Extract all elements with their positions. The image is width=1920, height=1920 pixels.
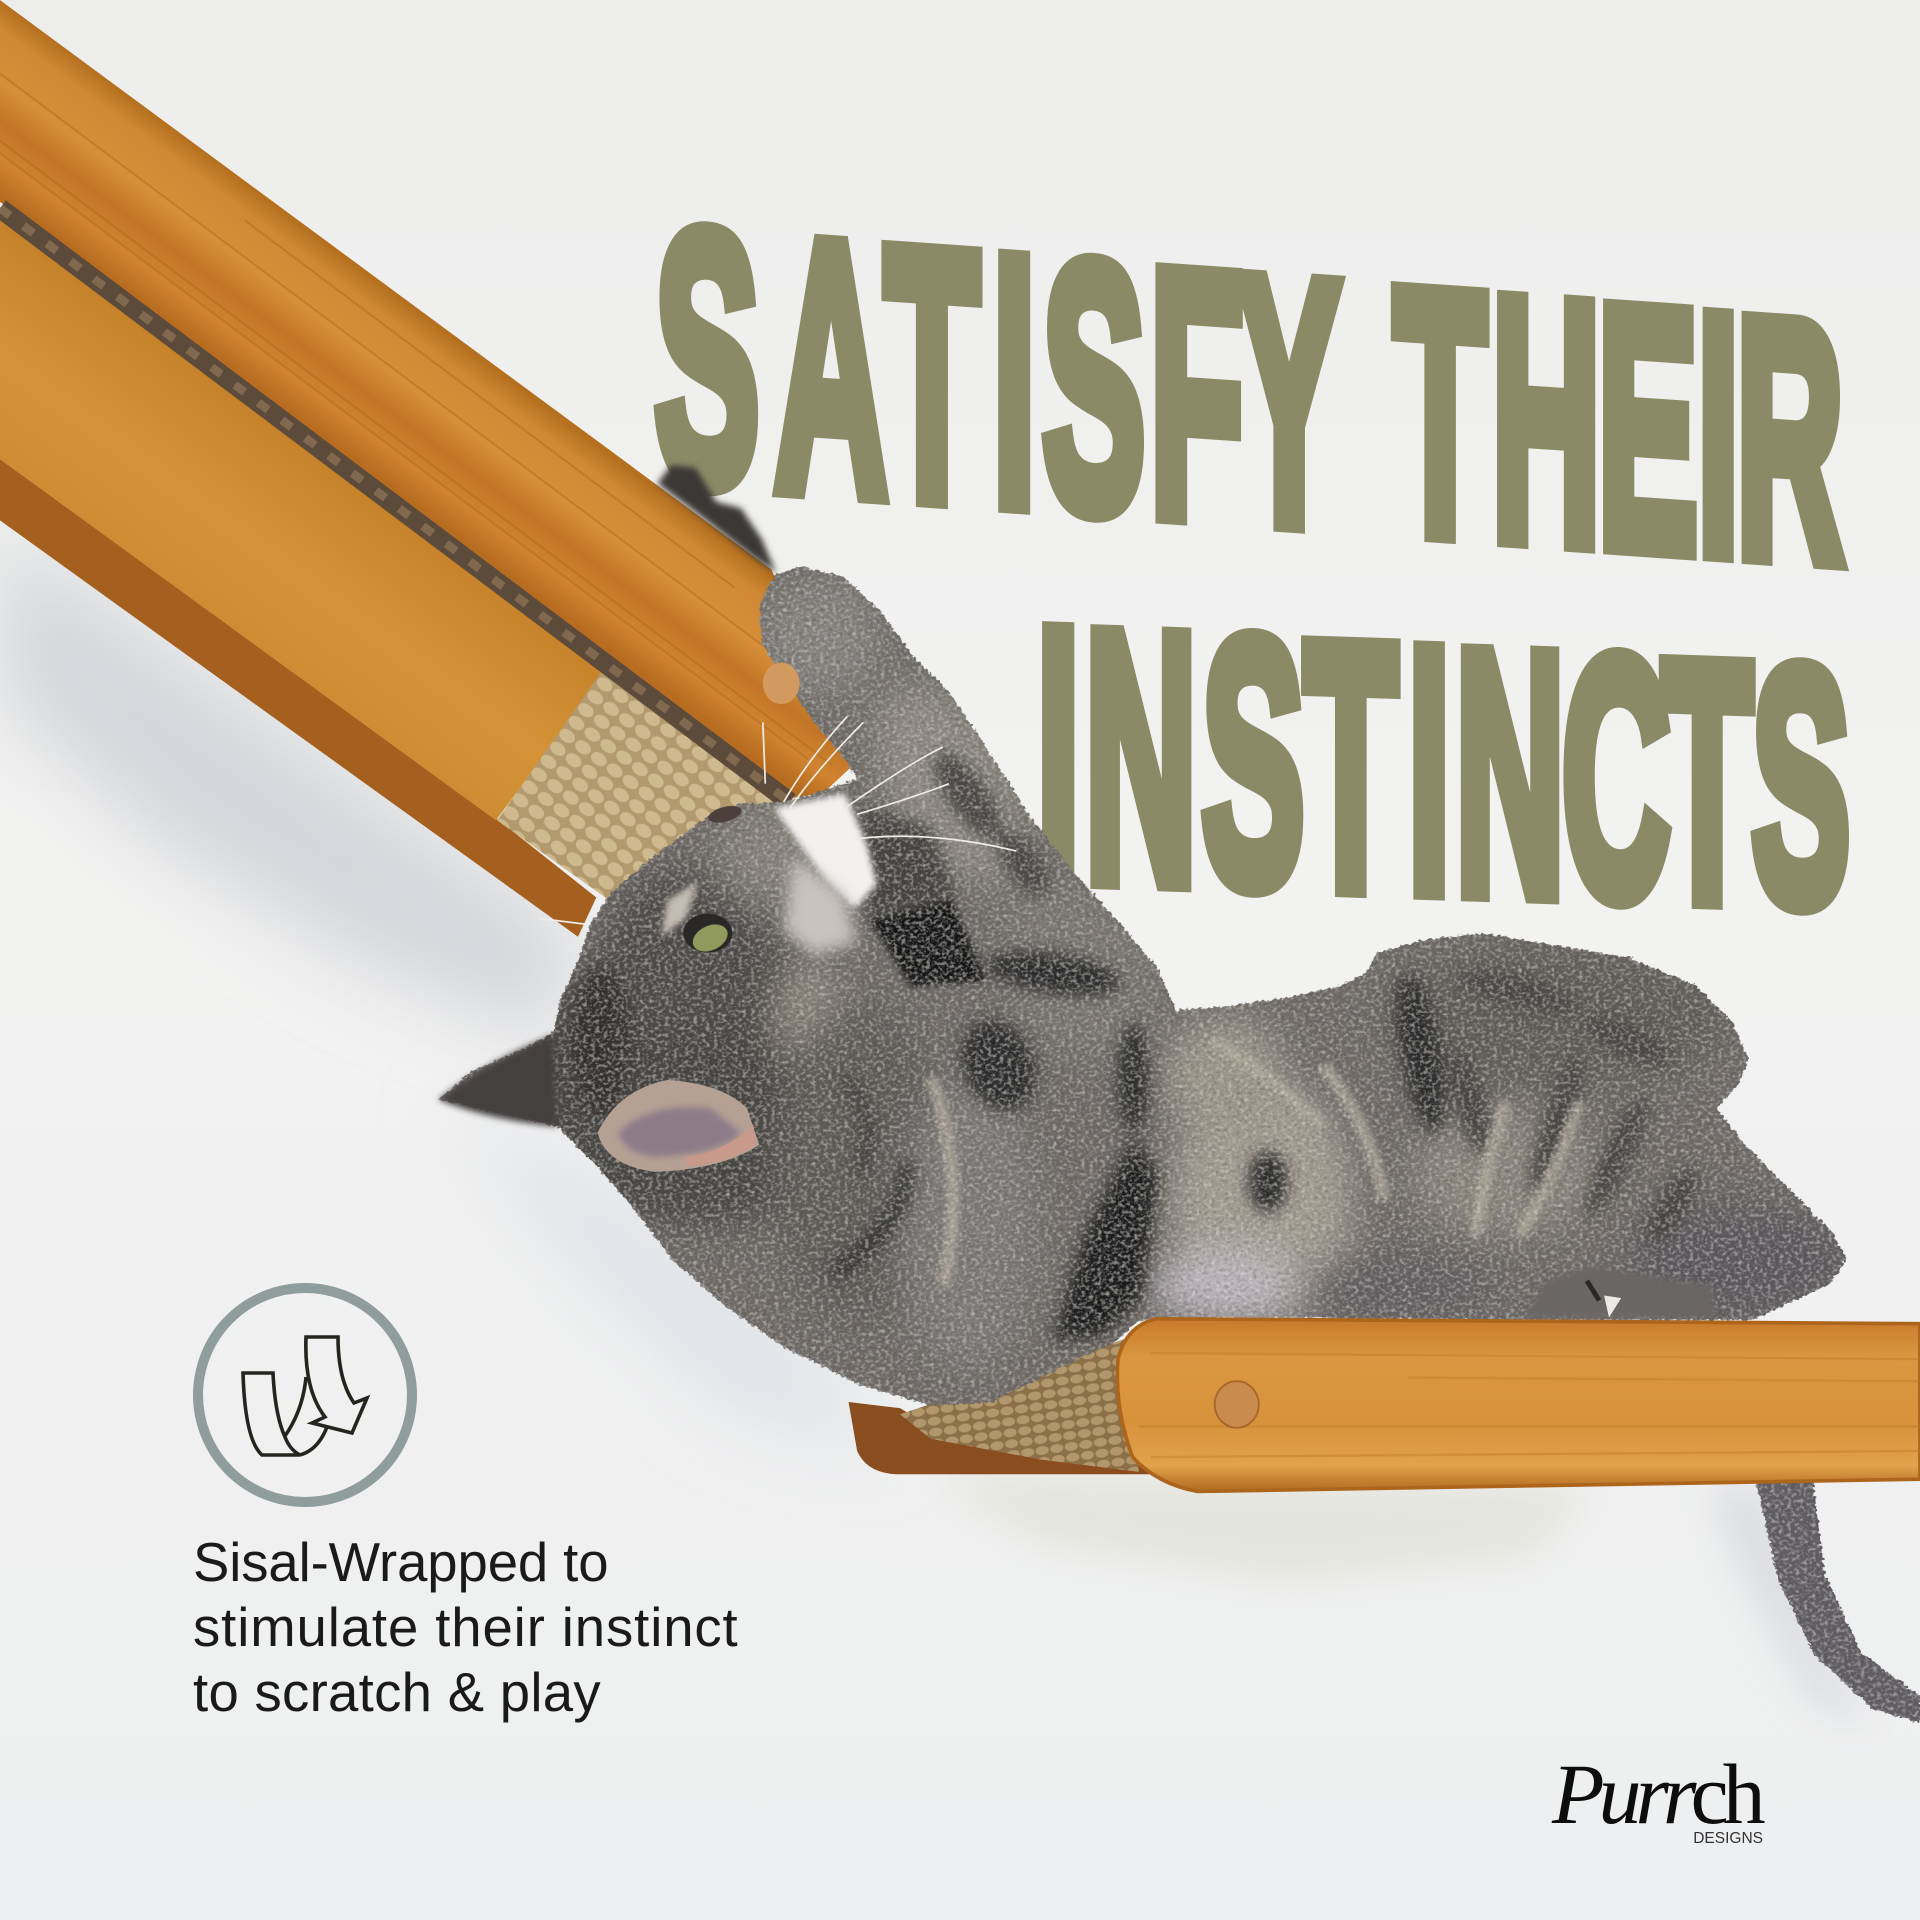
eye [683,913,732,957]
title: SATISFY THEIR: H [1492,228,1600,617]
diagonal bamboo beam [0,0,857,937]
shelf peg [1215,1381,1259,1428]
title: SATISFY THEIR: I [993,183,1036,579]
hidden back paw [658,465,776,573]
icon: sisal wrap badge [198,1288,412,1502]
title: INSTINCTS: I [1037,557,1080,954]
dark belly fold [1053,1139,1157,1341]
beige stripes on back [931,1041,1580,1286]
left ear [438,1035,557,1127]
title: INSTINCTS: S [1202,566,1304,960]
dark gap between arm and chin [858,807,955,920]
title: SATISFY THEIR: A [775,167,888,570]
beam center strip [0,208,790,802]
title: SATISFY THEIR: T [1394,218,1486,609]
cat [416,465,1920,1723]
cat body [416,539,1873,1420]
right ear [598,1080,759,1172]
upper peg [763,662,800,704]
logo wordmark: Purrch [1551,1746,1765,1842]
caption: stimulate their instinct [193,1597,739,1658]
beam sisal panel [497,669,790,902]
title: SATISFY THEIR: I [1698,246,1739,625]
title: SATISFY THEIR: S [1042,189,1145,587]
title: INSTINCTS: C [1562,585,1670,970]
title: INSTINCTS: N [1085,558,1197,957]
title: SATISFY THEIR: E [1598,235,1698,622]
beam top board [0,0,857,798]
shelf back [849,1338,1151,1474]
logo subtitle: DESIGNS [1693,1830,1763,1847]
white chin and chest [774,793,877,955]
icon ribbon [243,1337,367,1455]
title: INSTINCTS: S [1752,597,1850,974]
beam lower board [0,216,606,820]
beam dark rim [0,459,596,937]
caption: to scratch & play [193,1662,601,1723]
icon ring [198,1288,412,1502]
caption: Sisal-Wrapped to [193,1532,608,1593]
front paw on shelf [1524,1266,1714,1318]
title: SATISFY THEIR: F [1150,198,1244,592]
title: SATISFY THEIR: R [1737,250,1843,632]
title: INSTINCTS: I [1408,578,1450,964]
title: INSTINCTS: T [1662,593,1752,972]
forehead light streak [661,882,698,937]
shelf front board [1117,1319,1920,1491]
shelf grain [1139,1353,1920,1457]
logo [1551,1746,1765,1847]
nose [706,803,743,826]
dark armpit patch [869,899,986,986]
whiskers [539,716,1016,924]
wall shadows [0,527,1873,1727]
tail [1755,1476,1920,1723]
title: SATISFY THEIR: S [655,156,759,562]
title: INSTINCTS: T [1304,571,1397,962]
title: SATISFY THEIR: Y [1238,204,1340,599]
shelf dark back [849,1402,1151,1474]
shelf sisal [900,1338,1139,1472]
title: SATISFY THEIR: T [884,174,979,575]
title: INSTINCTS: N [1456,581,1565,967]
